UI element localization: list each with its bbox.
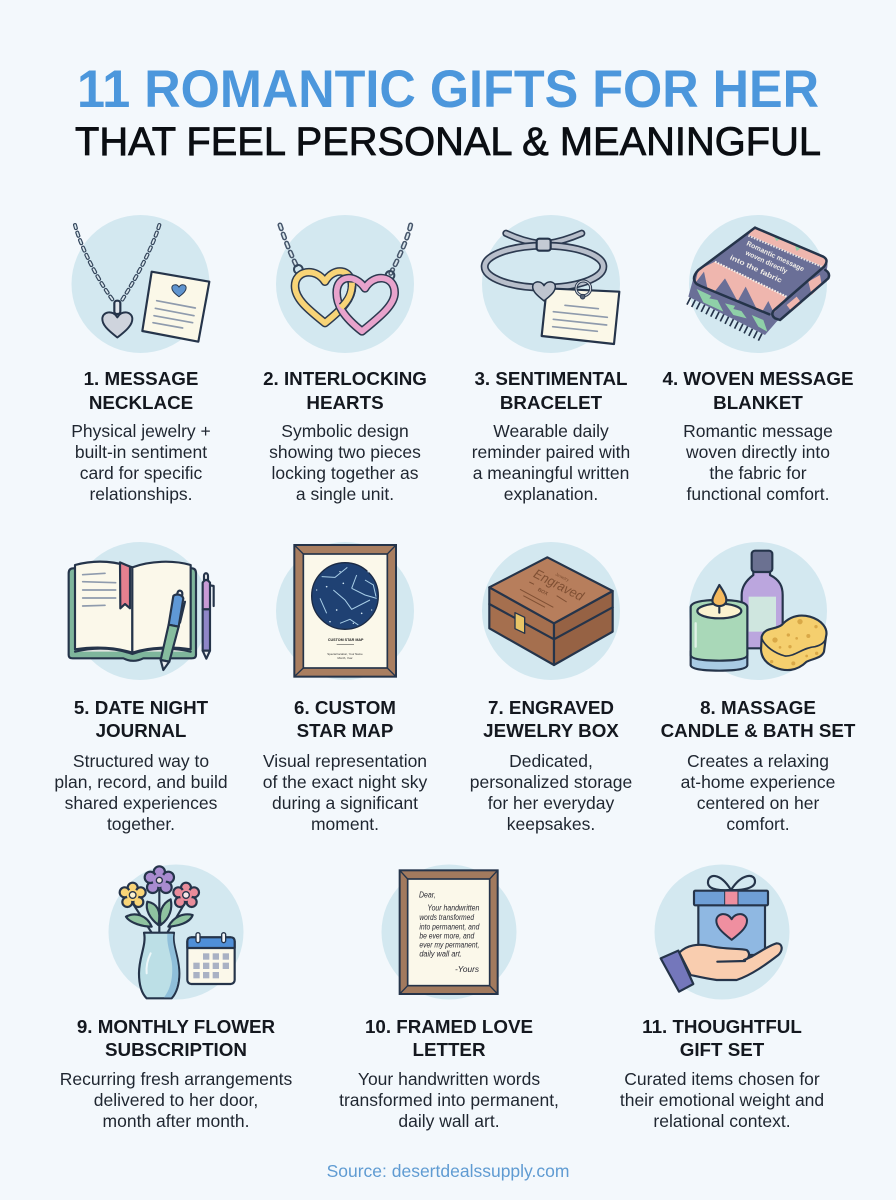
panel: 7 engraved jewelry box — [470, 542, 632, 834]
heading: 7. ENGRAVED — [488, 697, 614, 718]
description: showing two pieces — [269, 442, 421, 462]
icon: open journal and pens — [69, 562, 214, 670]
description: functional comfort. — [687, 484, 829, 504]
heading: 11. THOUGHTFUL — [642, 1016, 802, 1037]
description: delivered to her door, — [94, 1090, 258, 1110]
description: daily wall art. — [398, 1111, 500, 1131]
heading: 10. FRAMED LOVE — [365, 1016, 533, 1037]
panel: 4 woven message blanket — [663, 215, 853, 504]
description: the fabric for — [709, 463, 807, 483]
heading: BRACELET — [500, 392, 603, 413]
panel: 2 interlocking hearts — [263, 215, 427, 504]
description: relationships. — [89, 484, 193, 504]
description: comfort. — [726, 814, 790, 834]
description: relational context. — [653, 1111, 791, 1131]
description: at-home experience — [681, 772, 835, 792]
description: during a significant — [272, 793, 418, 813]
heading: STAR MAP — [297, 720, 393, 741]
description: built-in sentiment — [75, 442, 207, 462]
icon: framed handwritten letter: be ever more, and — [419, 931, 475, 940]
icon: framed handwritten letter: daily wall art. — [419, 950, 462, 959]
description: transformed into permanent, — [339, 1090, 559, 1110]
heading: 4. WOVEN MESSAGE — [663, 368, 853, 389]
panel: 5 date night journal — [54, 542, 228, 834]
description: Creates a relaxing — [687, 751, 829, 771]
heading: JOURNAL — [96, 720, 186, 741]
heading: 1. MESSAGE — [84, 368, 198, 389]
description: reminder paired with — [472, 442, 630, 462]
heading: LETTER — [412, 1039, 486, 1060]
description: Curated items chosen for — [624, 1069, 820, 1089]
description: woven directly into — [685, 442, 830, 462]
icon: flowers in vase and calendar — [120, 866, 235, 998]
icon: framed star map: CUSTOM STAR MAP — [328, 638, 364, 642]
description: a single unit. — [296, 484, 394, 504]
description: locking together as — [272, 463, 419, 483]
icon: interlocking hearts — [280, 225, 411, 331]
description: personalized storage — [470, 772, 632, 792]
icon: folded blanket: into the fabric — [728, 254, 783, 285]
title: 11 ROMANTIC GIFTS FOR HER — [77, 60, 819, 119]
icon: framed star map: Special location, Your Name — [327, 652, 363, 656]
icon: engraved wooden box — [489, 557, 613, 665]
description: explanation. — [504, 484, 598, 504]
panel: 3 sentimental bracelet — [472, 215, 630, 504]
icon: necklace and card — [75, 225, 209, 342]
icon: framed star map: Month, Year — [337, 656, 353, 660]
description: Symbolic design — [281, 421, 409, 441]
icon: framed handwritten letter: Your handwritten — [427, 904, 480, 913]
icon: framed handwritten letter: into permanent, and — [419, 922, 480, 931]
heading: CANDLE & BATH SET — [661, 720, 856, 741]
description: keepsakes. — [507, 814, 595, 834]
source line: Source: desertdealssupply.com — [327, 1161, 569, 1181]
icon: framed handwritten letter: Dear, — [419, 890, 436, 899]
description: moment. — [311, 814, 379, 834]
heading: GIFT SET — [680, 1039, 765, 1060]
description: Recurring fresh arrangements — [60, 1069, 292, 1089]
icon: engraved wooden box: Engraved — [531, 566, 587, 604]
heading: NECKLACE — [89, 392, 193, 413]
description: Wearable daily — [493, 421, 609, 441]
icon: folded blanket — [688, 228, 829, 339]
heading: BLANKET — [713, 392, 803, 413]
description: Dedicated, — [509, 751, 593, 771]
icon: framed handwritten letter: words transformed — [419, 913, 474, 922]
icon: framed handwritten letter: ever my permanent, — [419, 941, 479, 950]
icon: framed handwritten letter: -Yours — [455, 965, 479, 974]
icon: framed star map — [294, 545, 396, 677]
description: Physical jewelry + — [71, 421, 211, 441]
heading: 6. CUSTOM — [294, 697, 396, 718]
description: centered on her — [697, 793, 819, 813]
description: a meaningful written — [473, 463, 629, 483]
heading: JEWELRY BOX — [483, 720, 619, 741]
icon: candle, bottle and sponge — [691, 551, 826, 671]
description: together. — [107, 814, 175, 834]
title — [75, 60, 821, 164]
description: plan, record, and build — [54, 772, 228, 792]
panel: 10 framed love letter — [339, 864, 559, 1131]
icon: engraved wooden box: BOX — [536, 587, 549, 598]
heading: HEARTS — [306, 392, 384, 413]
heading: 3. SENTIMENTAL — [474, 368, 628, 389]
description: shared experiences — [65, 793, 218, 813]
title: THAT FEEL PERSONAL & MEANINGFUL — [75, 120, 821, 164]
panel: 1 message necklace — [71, 215, 211, 504]
icon: bracelet with tag — [485, 233, 619, 344]
panel: 6 custom star map — [263, 542, 427, 834]
description: month after month. — [103, 1111, 249, 1131]
panel: 11 thoughtful gift set — [620, 864, 824, 1131]
description: Your handwritten words — [358, 1069, 540, 1089]
panel: 8 massage candle and bath set — [661, 542, 856, 834]
description: Structured way to — [73, 751, 209, 771]
description: card for specific — [80, 463, 203, 483]
icon: folded blanket: woven directly — [743, 249, 788, 275]
icon: framed handwritten letter — [400, 870, 498, 994]
description: Romantic message — [683, 421, 833, 441]
description: Visual representation — [263, 751, 427, 771]
description: for her everyday — [488, 793, 614, 813]
heading: 5. DATE NIGHT — [74, 697, 208, 718]
heading: 9. MONTHLY FLOWER — [77, 1016, 275, 1037]
icon: gift box on a hand — [661, 876, 782, 992]
icon: folded blanket: Romantic message — [745, 240, 805, 273]
panel: 9 monthly flower subscription — [60, 864, 292, 1131]
icon: engraved wooden box: Jewelry — [555, 571, 571, 583]
heading: 8. MASSAGE — [700, 697, 816, 718]
heading: 2. INTERLOCKING — [263, 368, 427, 389]
description: their emotional weight and — [620, 1090, 824, 1110]
description: of the exact night sky — [263, 772, 427, 792]
heading: SUBSCRIPTION — [105, 1039, 247, 1060]
